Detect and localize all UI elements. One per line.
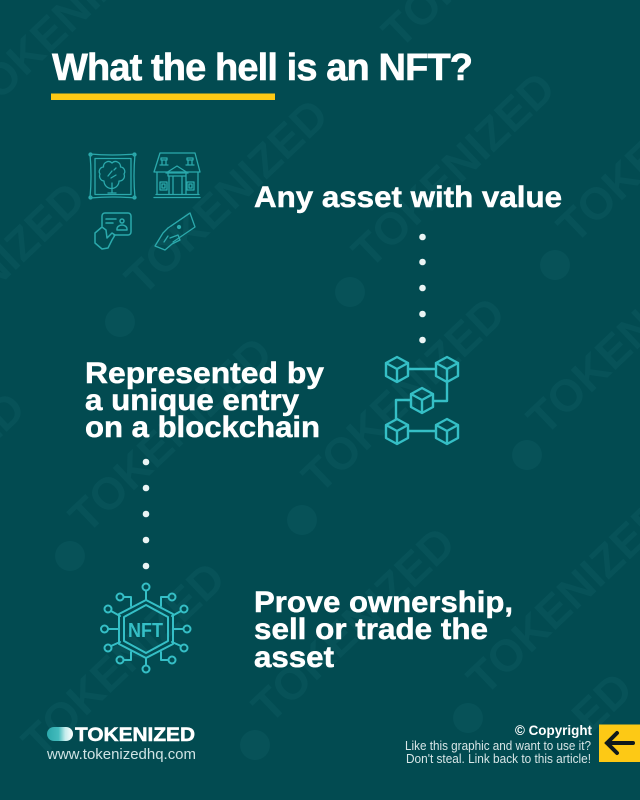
icon group: assets (89, 153, 200, 250)
step 2 text: Represented by (85, 357, 325, 390)
copyright notice (405, 723, 592, 766)
icon: NFT chip (101, 584, 190, 672)
text: TOKENIZED (12, 552, 235, 767)
icon: hand holding ticket (155, 213, 195, 250)
title underline (51, 94, 275, 100)
text: TOKENIZED (342, 62, 565, 277)
icon: left arrow (607, 733, 633, 753)
dotted connector 1 (419, 234, 426, 343)
step 3 text: asset (254, 641, 334, 674)
text: TOKENIZED (59, 327, 282, 542)
copyright notice: Don't steal. Link back to this article! (406, 752, 591, 766)
step 2 text: a unique entry (85, 384, 300, 417)
step 2 text: on a blockchain (85, 411, 320, 444)
dotted connector 2 (143, 459, 149, 569)
icon: house (154, 153, 200, 198)
text: TOKENIZED (115, 89, 338, 304)
text: ED (562, 662, 640, 742)
title: What the hell is an NFT? (52, 47, 473, 89)
icon: blockchain cubes (386, 357, 458, 444)
footer logo (47, 725, 195, 746)
step 3 text: sell or trade the (254, 613, 488, 646)
text: TOKENIZED (292, 287, 515, 502)
copyright notice: Like this graphic and want to use it? (405, 739, 591, 753)
logo mark (47, 727, 73, 741)
yellow arrow box (599, 724, 640, 762)
website url: www.tokenizedhq.com (46, 746, 196, 763)
logo wordmark: TOKENIZED (75, 725, 195, 746)
step 3 text: Prove ownership, (254, 586, 513, 619)
step 2 text (85, 357, 325, 444)
copyright notice: © Copyright (515, 723, 592, 738)
step 3 text (254, 586, 513, 674)
step 1 text: Any asset with value (254, 181, 562, 214)
text: TOKENIZED (242, 517, 465, 732)
icon: framed tree painting (89, 153, 136, 199)
icon label: NFT: NFT (128, 620, 163, 642)
icon: hand holding ID card (95, 213, 131, 249)
